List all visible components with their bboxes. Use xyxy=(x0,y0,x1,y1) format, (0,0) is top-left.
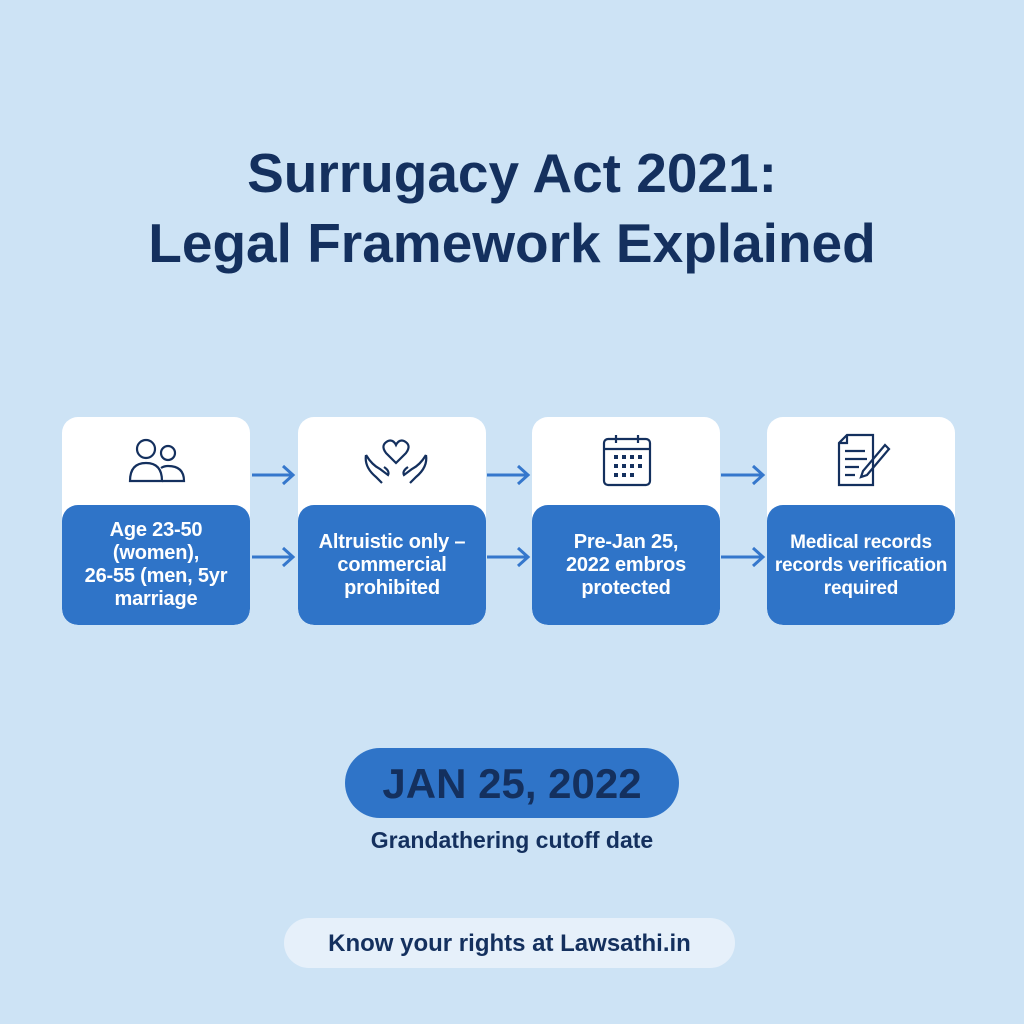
text: 2022 embros xyxy=(566,554,686,576)
date pill: JAN 25, 2022 xyxy=(382,760,642,807)
text xyxy=(767,505,955,625)
text: age: 26-55 (men, 5yr xyxy=(85,565,227,587)
text: age xyxy=(62,505,250,625)
card 2: altruistic xyxy=(298,417,486,625)
card 3: grandfathering xyxy=(532,417,720,625)
icon: calendar xyxy=(602,435,652,486)
text: Pre-Jan 25, xyxy=(574,530,678,552)
footer pill: Know your rights at Lawsathi.in xyxy=(328,930,691,957)
icon: people xyxy=(128,438,186,482)
text: age: Age 23-50 xyxy=(110,519,202,541)
text: age: (women), xyxy=(113,542,199,564)
footer pill xyxy=(284,918,735,968)
card 4: medical records xyxy=(767,417,955,625)
title: Surrugacy Act 2021: xyxy=(247,142,777,204)
text: Altruistic only – xyxy=(319,530,465,552)
text: age: marriage xyxy=(115,588,197,610)
icon: hands heart xyxy=(364,439,428,484)
text: required xyxy=(824,578,898,598)
text xyxy=(298,505,486,625)
text: Medical records xyxy=(790,532,932,552)
caption: Grandathering cutoff date xyxy=(371,827,653,853)
card 1: eligibility xyxy=(62,417,250,625)
text: records verification xyxy=(775,554,947,576)
text: protected xyxy=(581,576,671,598)
title xyxy=(148,142,876,274)
date pill xyxy=(345,748,679,818)
text xyxy=(532,505,720,625)
text: commercial xyxy=(337,554,447,576)
title: Legal Framework Explained xyxy=(148,212,876,274)
text: prohibited xyxy=(344,576,440,598)
icon: document pen xyxy=(838,434,890,486)
